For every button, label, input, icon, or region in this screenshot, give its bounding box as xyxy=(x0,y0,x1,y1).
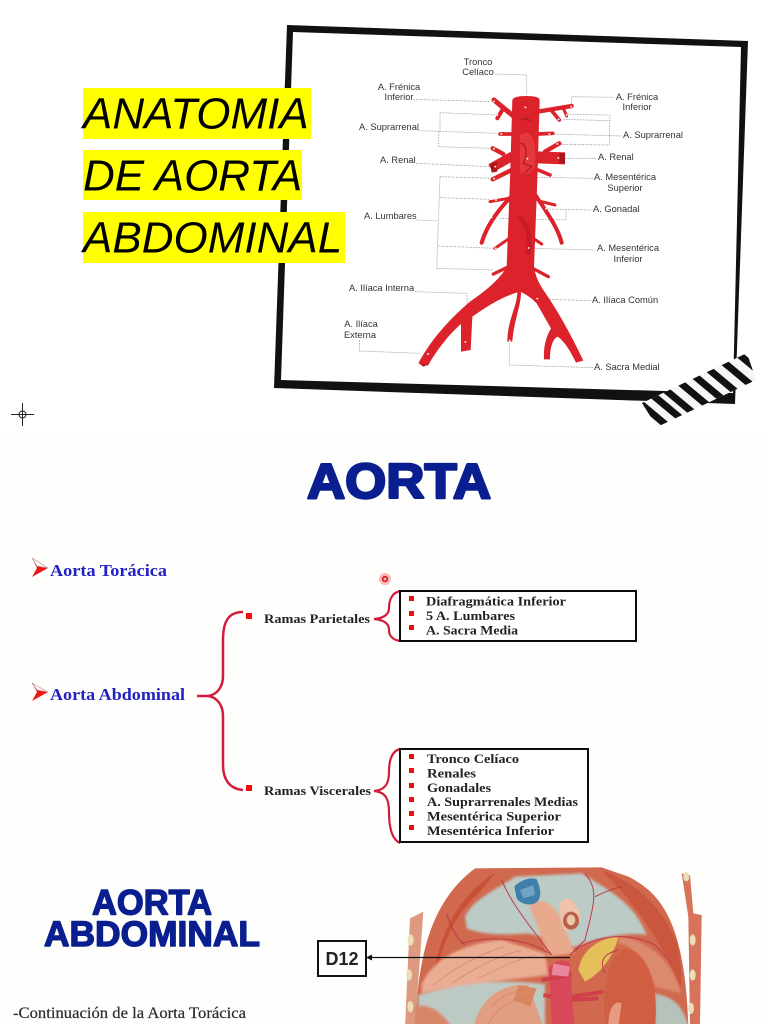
vessel openings xyxy=(427,100,572,355)
title: ABDOMINAL xyxy=(80,214,342,262)
box: parietales: Diafragmática Inferior xyxy=(426,594,566,608)
heading: AORTA ABDOMINAL xyxy=(44,884,260,954)
dotted leader lines xyxy=(359,74,622,368)
diagram labels: A. Suprarrenal xyxy=(623,130,683,140)
box: parietales: A. Sacra Media xyxy=(426,622,519,638)
main brace xyxy=(197,612,243,790)
diagram labels: A. Mesentérica xyxy=(594,172,657,182)
box: viscerales: Gonadales xyxy=(427,780,491,795)
box: viscerales xyxy=(400,749,588,842)
icon: crosshair cursor xyxy=(11,403,34,426)
diagram labels: A. Lumbares xyxy=(364,211,417,221)
brace: viscerales xyxy=(374,749,400,843)
label box: D12: D12 xyxy=(325,949,359,969)
diagram labels: A. Ilíaca Interna xyxy=(349,283,415,293)
diagram labels: Superior xyxy=(607,183,643,193)
label: Ramas Viscerales: Ramas Viscerales xyxy=(264,783,371,798)
box: viscerales: Mesentérica Superior xyxy=(427,808,561,824)
classification diagram xyxy=(32,558,636,843)
washi tape xyxy=(642,354,756,426)
box: viscerales: A. Suprarrenales Medias xyxy=(427,794,578,809)
box: parietales xyxy=(400,591,636,641)
aorta illustration xyxy=(359,74,622,368)
diagram labels: A. Renal xyxy=(598,152,634,162)
title xyxy=(80,88,345,263)
diagram labels: A. Frénica xyxy=(616,92,659,102)
diagram labels: Inferior xyxy=(614,254,642,264)
icon: red pointer dot xyxy=(379,573,391,585)
diagram labels: A. Ilíaca Común xyxy=(592,295,658,305)
artery branches xyxy=(482,100,572,277)
heading: AORTA ABDOMINAL: ABDOMINAL xyxy=(44,915,260,954)
diagram labels: A. Ilíaca xyxy=(344,319,379,329)
heading: AORTA: AORTA xyxy=(307,455,491,509)
box: viscerales: Renales xyxy=(427,766,476,780)
box: viscerales: Tronco Celíaco xyxy=(427,751,519,766)
diagram labels: A. Frénica xyxy=(378,82,421,92)
diagram labels: A. Suprarrenal xyxy=(359,122,419,132)
darker vessel shading xyxy=(518,117,535,123)
body text: -Continuación de la Aorta Torácica xyxy=(13,1005,246,1022)
box: viscerales: Mesentérica Inferior xyxy=(427,823,554,838)
icon: arrow bullet xyxy=(32,558,48,577)
diagram labels: A. Renal xyxy=(380,155,416,165)
diagram labels xyxy=(344,57,683,372)
muscle striations xyxy=(432,947,535,1023)
diagram labels: Externa xyxy=(344,330,377,340)
label box: D12 xyxy=(318,941,366,976)
bullets xyxy=(246,613,252,791)
diagram labels: Inferior xyxy=(623,102,651,112)
title: ANATOMIA xyxy=(80,90,309,138)
photo frame with aorta diagram xyxy=(274,25,748,404)
lower slide background xyxy=(0,432,768,1024)
label: Aorta Torácica: Aorta Torácica xyxy=(50,561,167,580)
diagram labels: A. Sacra Medial xyxy=(594,362,660,372)
heading: AORTA ABDOMINAL: AORTA xyxy=(92,884,212,922)
diagram labels: Inferior xyxy=(385,92,413,102)
diagram labels: A. Gonadal xyxy=(593,204,640,214)
diagram labels: Tronco xyxy=(464,57,492,67)
box: parietales: 5 A. Lumbares xyxy=(426,608,515,623)
diagram labels: A. Mesentérica xyxy=(597,243,660,253)
label: Aorta Abdominal: Aorta Abdominal xyxy=(50,685,185,704)
anatomical illustration of the diaphragm xyxy=(405,867,702,1024)
label: Ramas Parietales: Ramas Parietales xyxy=(264,611,370,626)
main aortic trunk xyxy=(418,96,583,366)
title: DE AORTA xyxy=(83,152,302,200)
brace: parietales xyxy=(374,591,400,641)
arrow: D12 pointer xyxy=(366,954,570,960)
icon: arrow bullet xyxy=(32,683,48,701)
diagram labels: Celíaco xyxy=(462,67,494,77)
